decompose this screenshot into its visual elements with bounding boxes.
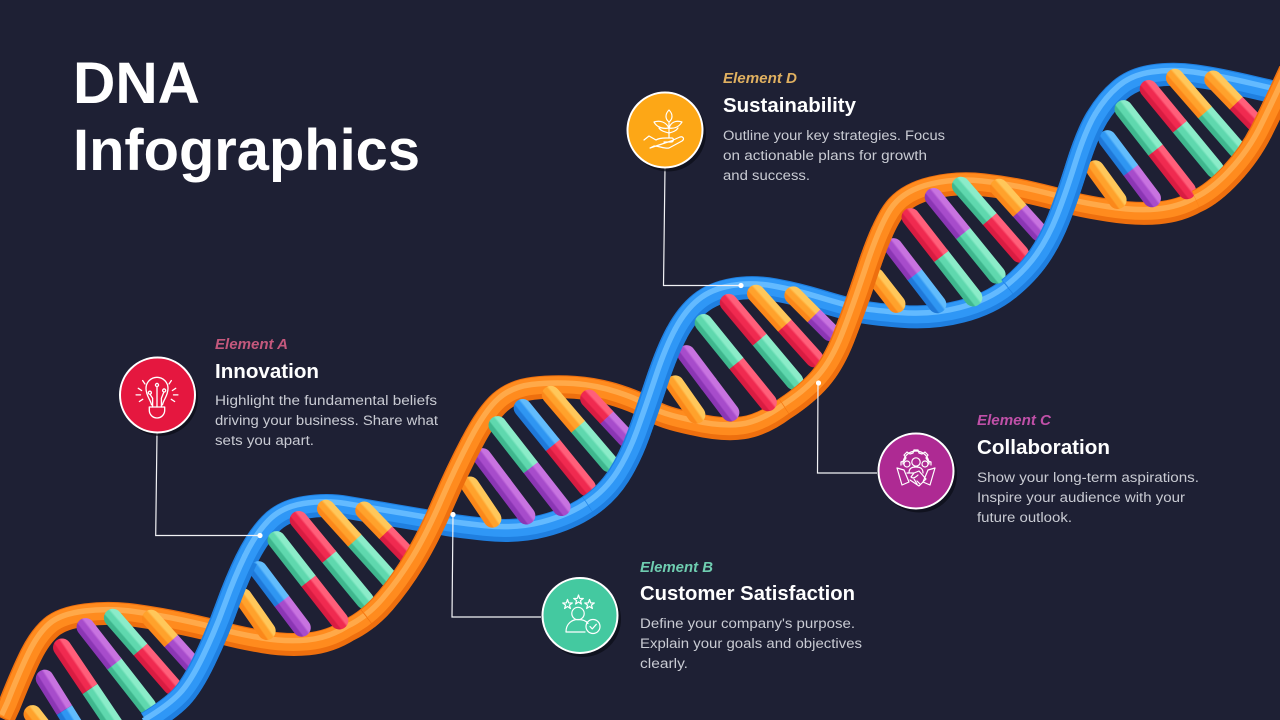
text block: Innovation: sets you apart.: [215, 433, 314, 448]
title: [73, 51, 420, 183]
heading: Innovation: Innovation: [215, 361, 319, 383]
base pairs: section 1: [20, 605, 204, 720]
icon: light bulb: [136, 377, 178, 418]
badge: Collaboration: [878, 434, 957, 512]
label: Element D: Element D: [723, 71, 798, 87]
heading: Customer Satisfaction: Customer Satisfaction: [640, 583, 855, 605]
text block: Collaboration: future outlook.: [977, 510, 1072, 525]
panel: Element A: [120, 337, 438, 448]
heading: Collaboration: Collaboration: [977, 437, 1110, 459]
blue strand front crossing 1: [144, 556, 246, 720]
connector: Element A: [156, 433, 263, 538]
blue strand front crossing 3: [1007, 114, 1097, 289]
text block: Customer Satisfaction: Explain your goals and objectives: [640, 636, 862, 651]
base pairs: section 6: [1083, 65, 1272, 213]
base pairs: section 5: [863, 173, 1052, 317]
label: Element C: Element C: [977, 413, 1052, 429]
text block: Collaboration: Inspire your audience with your: [977, 490, 1186, 505]
panel: Element C: [878, 413, 1199, 525]
text block: Sustainability: [723, 128, 945, 183]
connector: Element C: [816, 380, 877, 473]
text block: Collaboration: Show your long-term aspirations.: [977, 470, 1199, 485]
panel: Element D: [628, 71, 945, 183]
text block: Customer Satisfaction: [640, 616, 862, 671]
title: DNA: [73, 51, 200, 116]
title: Infographics: [73, 118, 420, 183]
blue strand front crossing 2: [587, 328, 677, 506]
text block: Customer Satisfaction: clearly.: [640, 656, 688, 671]
badge: Sustainability: [628, 92, 706, 172]
badge: Customer Satisfaction: [542, 578, 621, 657]
connector: Element D: [664, 168, 744, 288]
connector: Element B: [450, 512, 541, 617]
base pairs: section 3: [458, 382, 639, 531]
label: Element B: Element B: [640, 560, 713, 576]
icon: customer with stars: [563, 595, 600, 634]
base pairs: section 2: [231, 496, 420, 643]
panel: Element B: [542, 560, 862, 671]
badge: Innovation: [120, 358, 198, 436]
orange strand front crossing 1: [366, 438, 472, 618]
text block: Innovation: Highlight the fundamental beliefs: [215, 393, 437, 408]
text block: Sustainability: and success.: [723, 168, 810, 183]
orange strand front crossing 3: [1195, 67, 1280, 201]
text block: Innovation: [215, 393, 438, 448]
icon: team handshake: [897, 450, 935, 486]
heading: Sustainability: Sustainability: [723, 95, 857, 117]
text block: Sustainability: Outline your key strategies. Focus: [723, 128, 945, 143]
text block: Sustainability: on actionable plans for growth: [723, 148, 927, 163]
text block: Collaboration: [977, 470, 1199, 525]
orange strand front crossing 2: [784, 228, 882, 408]
icon: plant in hand: [644, 110, 683, 148]
text block: Innovation: driving your business. Share what: [215, 413, 438, 428]
label: Element A: Element A: [215, 337, 288, 353]
text block: Customer Satisfaction: Define your company's purpose.: [640, 616, 855, 631]
base pairs: section 4: [663, 281, 843, 427]
